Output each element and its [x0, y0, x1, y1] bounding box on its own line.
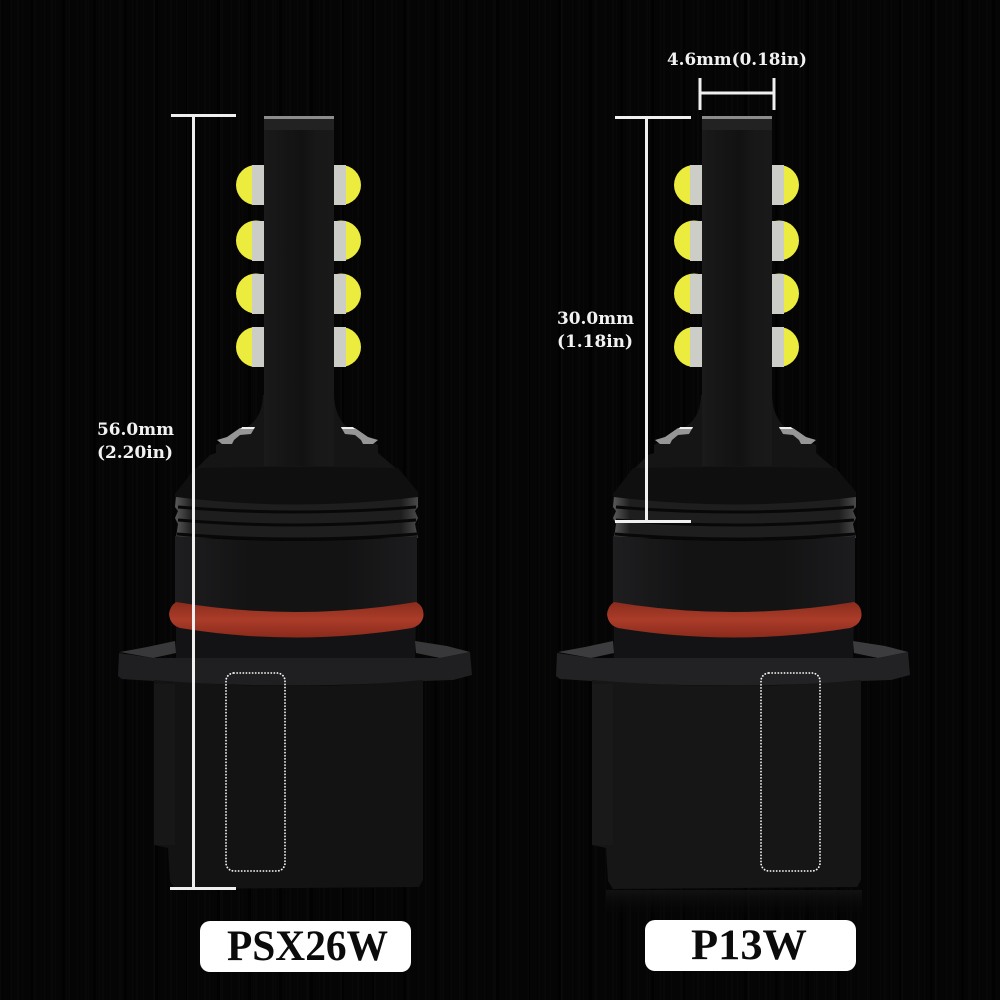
dimension text: 30.0mm (1.18in): (1.18in) [557, 332, 633, 352]
flange with tabs [118, 641, 472, 686]
threaded section [175, 497, 418, 539]
stem [702, 116, 772, 466]
neck hooks [217, 427, 378, 444]
red o-ring [607, 602, 862, 638]
left key strip [592, 684, 613, 845]
collar [176, 620, 416, 660]
dimension arrow: 30.0mm length [615, 117, 691, 522]
label: P13W: P13W [691, 922, 807, 969]
dimension text: 56.0mm (2.20in): 56.0mm [97, 420, 174, 440]
label: PSX26W: PSX26W [227, 923, 388, 970]
dimension text: 30.0mm (1.18in): 30.0mm [557, 309, 634, 329]
dimension arrow: 56.0mm length [170, 115, 236, 888]
collar [614, 620, 854, 660]
neck and shoulder [613, 395, 856, 500]
cylinder body [613, 536, 855, 612]
stem [264, 116, 334, 466]
bulb: PSX26W [118, 116, 472, 889]
bulb: P13W [556, 116, 910, 889]
reflection under P13W [606, 890, 862, 916]
neck hooks [655, 427, 816, 444]
dotted outline: P13W connector [761, 673, 820, 871]
cylinder body [175, 536, 417, 612]
dotted outline: PSX26W connector [226, 673, 285, 871]
lower shoulder shade [175, 467, 418, 505]
threaded section [613, 497, 856, 539]
red o-ring [169, 602, 424, 638]
neck and shoulder [175, 395, 418, 500]
connector base [592, 680, 861, 889]
LED chips [236, 165, 361, 367]
connector base [154, 680, 423, 889]
dimension text: 56.0mm (2.20in): (2.20in) [97, 443, 173, 463]
flange with tabs [556, 641, 910, 686]
dimension arrow: 4.6mm width [700, 78, 774, 110]
label: P13W [645, 920, 856, 971]
dimension text: 4.6mm (0.18in): 4.6mm(0.18in) [667, 50, 807, 70]
LED chips [674, 165, 799, 367]
left key strip [154, 684, 175, 845]
lower shoulder shade [613, 467, 856, 505]
